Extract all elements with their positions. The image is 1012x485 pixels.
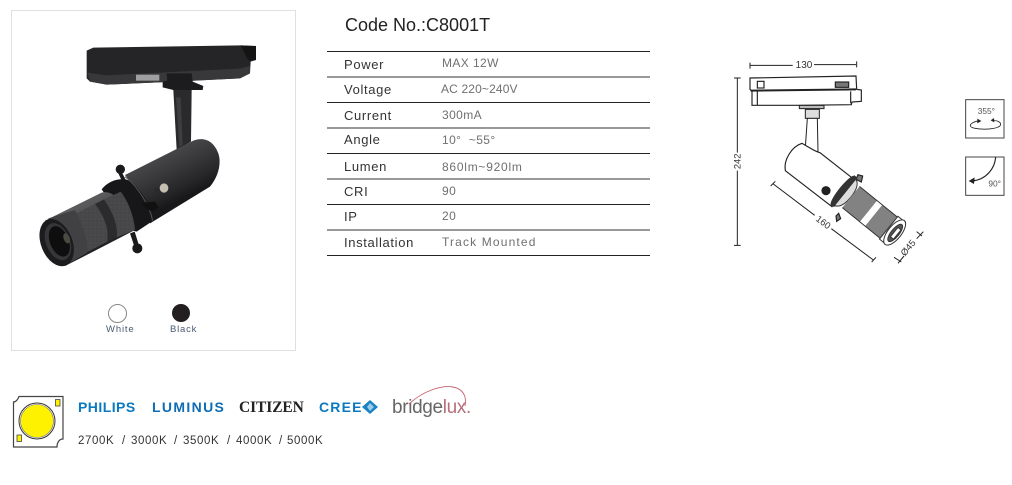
specification table bbox=[327, 51, 650, 256]
colour temperatures: 4000K bbox=[236, 435, 272, 447]
lens opening bbox=[33, 214, 80, 271]
colour swatch: black bbox=[172, 304, 190, 322]
stem bbox=[163, 73, 203, 150]
length dimension 160: 160 bbox=[814, 214, 832, 231]
icon: 355 degree rotation bbox=[966, 100, 1004, 138]
brand logo: Bridgelux bbox=[392, 386, 471, 418]
lens barrel drawing bbox=[828, 174, 912, 251]
colour temperatures bbox=[78, 435, 323, 447]
track adapter bbox=[87, 45, 256, 85]
row: CRI: CRI bbox=[344, 184, 368, 199]
colour temperatures: 3500K bbox=[183, 435, 219, 447]
colour temperatures: 3000K bbox=[131, 435, 167, 447]
track adapter outline bbox=[750, 76, 861, 105]
row: angle: Angle bbox=[344, 132, 380, 147]
row: installation: Installation bbox=[344, 235, 414, 250]
row: IP: IP bbox=[344, 209, 358, 224]
colour temperatures: / bbox=[174, 435, 178, 447]
brand logo: Cree: CREE bbox=[319, 399, 363, 415]
colour label: black: Black bbox=[170, 324, 197, 335]
spotlight body outline bbox=[785, 143, 863, 221]
row: lumen: Lumen bbox=[344, 159, 387, 174]
lens barrel bbox=[45, 192, 135, 266]
stem outline bbox=[799, 105, 824, 152]
icon: COB LED chip bbox=[12, 396, 64, 448]
height dimension 242: 242 bbox=[733, 154, 743, 169]
text: AC 220~240V bbox=[441, 82, 518, 96]
colour label: white: White bbox=[106, 324, 135, 335]
brand logo: Luminus: LUMINUS bbox=[152, 399, 225, 415]
product photo: track spotlight bbox=[39, 45, 256, 266]
row: current: Current bbox=[344, 108, 392, 123]
colour temperatures: / bbox=[122, 435, 126, 447]
colour temperatures: / bbox=[227, 435, 231, 447]
text: Track Mounted bbox=[442, 235, 537, 249]
text: 860lm~920lm bbox=[442, 160, 523, 174]
colour temperatures: 2700K bbox=[78, 435, 114, 447]
width dimension 130: 130 bbox=[796, 60, 813, 71]
title: Code No.:C8001T bbox=[345, 15, 490, 35]
icon: Cree diamond bbox=[362, 400, 378, 414]
icon: 90 degree tilt bbox=[966, 157, 1004, 195]
text: 300mA bbox=[442, 108, 482, 122]
text: MAX 12W bbox=[442, 56, 499, 70]
brand logo: Philips: PHILIPS bbox=[78, 399, 136, 415]
height dimension 242 bbox=[733, 78, 743, 245]
length dimension 160 bbox=[771, 181, 876, 262]
text: 90 bbox=[442, 184, 456, 198]
text: 20 bbox=[442, 209, 456, 223]
dimension drawing bbox=[733, 60, 1004, 264]
silver adjustment knob bbox=[154, 183, 168, 195]
width dimension 130 bbox=[750, 60, 857, 71]
brand logo: Bridgelux: bridgelux. bbox=[392, 397, 471, 418]
colour temperatures: 5000K bbox=[287, 435, 323, 447]
collar ring bbox=[102, 177, 159, 232]
icon: 355 degree rotation: 355° bbox=[978, 106, 995, 116]
panel: product photo bbox=[11, 10, 296, 351]
colour temperatures: / bbox=[279, 435, 283, 447]
diameter dimension 45: Ø45 bbox=[899, 238, 918, 258]
diameter dimension 45 bbox=[894, 232, 923, 263]
brand logo: Citizen: CITIZEN bbox=[239, 399, 304, 416]
row: power: Power bbox=[344, 57, 384, 72]
text: 10° ~55° bbox=[442, 133, 496, 147]
row: voltage: Voltage bbox=[344, 82, 392, 97]
colour swatch: white bbox=[108, 304, 127, 323]
icon: 90 degree tilt: 90° bbox=[988, 179, 1001, 189]
knobs bbox=[116, 165, 142, 253]
body cylinder bbox=[125, 139, 220, 223]
